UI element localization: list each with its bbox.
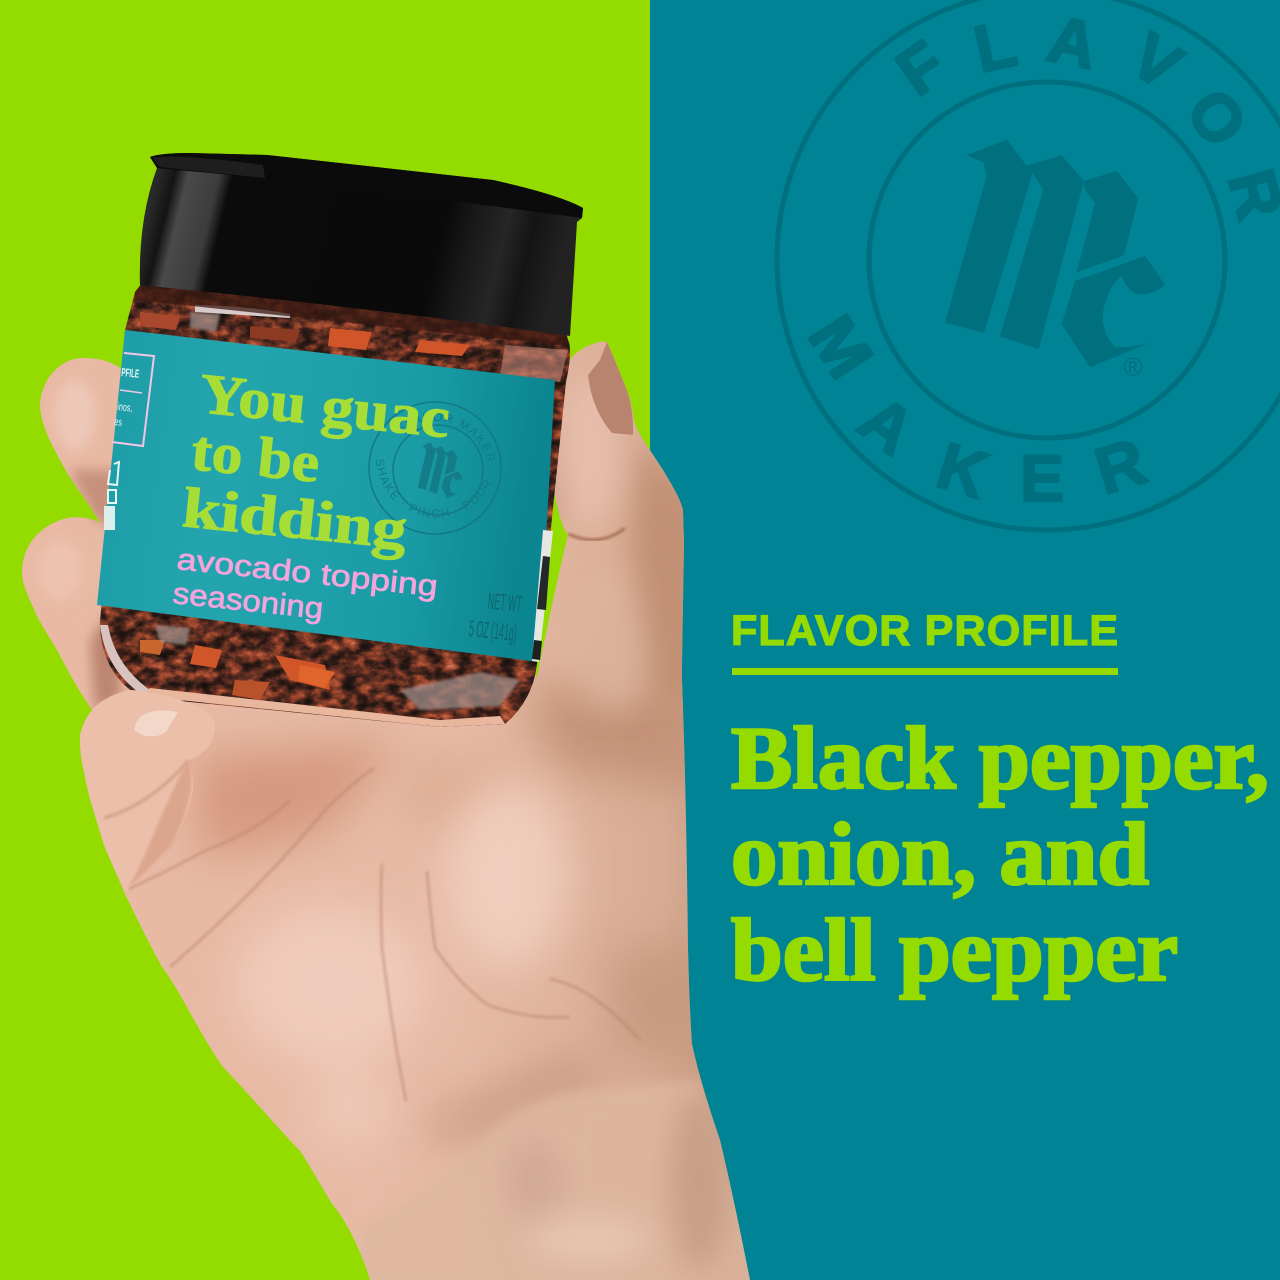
finger crease [104, 761, 188, 818]
cap [140, 153, 583, 336]
seal registered mark: ® [1123, 352, 1143, 382]
jar [97, 153, 583, 727]
label barcode [532, 530, 553, 662]
label side panel text [114, 365, 140, 428]
label title: You guac to be kidding [180, 362, 453, 562]
flavor description: Black pepper, [731, 710, 1269, 808]
wrist skin [360, 1080, 770, 1280]
label title: You guac to be kidding: You guac [197, 362, 453, 450]
label side panel text: PFILE [121, 365, 140, 380]
label [97, 330, 555, 662]
seal lettering: FLAVOR MAKER [794, 1, 1280, 515]
heading underline [732, 668, 1118, 675]
seal lettering: FLAVOR MAKER: L [968, 6, 1023, 86]
label seal text [376, 413, 495, 518]
palm creases [129, 768, 640, 1101]
label subtitle: avocado topping seasoning: seasoning [171, 577, 325, 626]
glass base highlight [100, 625, 150, 697]
flavor description: bell pepper [731, 902, 1178, 1000]
thumb tones [554, 381, 684, 708]
hand: palm and fingers [22, 342, 770, 1280]
lower finger [80, 690, 215, 891]
label subtitle: avocado topping seasoning: avocado topping [175, 543, 439, 603]
seal lettering: FLAVOR MAKER: R [1087, 424, 1154, 508]
seal lettering: FLAVOR MAKER: A [1042, 1, 1104, 83]
seal outer and inner rings [777, 0, 1280, 530]
seal lettering: FLAVOR MAKER: V [1118, 18, 1195, 104]
label seal monogram [418, 442, 463, 499]
label side panel [112, 353, 154, 446]
label side panel text: es [114, 416, 123, 428]
seal lettering: FLAVOR MAKER: O [1172, 75, 1262, 160]
cap rim [150, 153, 583, 218]
fingernail [134, 710, 178, 737]
jar shoulder glass [500, 345, 568, 382]
label icons [108, 462, 119, 503]
highlights on palm [231, 768, 582, 1146]
label watermark seal [369, 402, 501, 534]
teal background panel [650, 0, 1280, 1280]
photo: hand holding jar [22, 153, 750, 1280]
label side panel text: inos, [117, 401, 133, 414]
label: NET WT [487, 588, 523, 617]
finger shading [38, 380, 125, 710]
seasoning flakes [140, 312, 470, 700]
flavor description [731, 710, 1269, 1000]
label net weight [468, 588, 523, 646]
seal monogram [945, 140, 1165, 367]
glass top highlight [195, 305, 290, 318]
watermark: Flavor Maker seal [777, 0, 1280, 530]
label barcode icon [104, 506, 115, 530]
green background panel [0, 0, 650, 1280]
seal lettering: FLAVOR MAKER: K [929, 428, 997, 512]
thumbnail [588, 342, 633, 435]
label subtitle: avocado topping seasoning [171, 543, 439, 626]
seal lettering: FLAVOR MAKER: F [883, 26, 958, 110]
thumb base crease [568, 528, 625, 540]
jar contents: seasoning [100, 285, 570, 727]
warm shadows on palm [195, 680, 700, 1150]
flavor description: onion, and [731, 806, 1149, 904]
seal lettering: FLAVOR MAKER: E [1020, 441, 1064, 515]
pale flakes [155, 312, 520, 710]
label seal text: FLAVOR MAKER [400, 413, 495, 462]
finger shading [128, 761, 191, 888]
label title: You guac to be kidding: to be [189, 419, 322, 495]
label title: You guac to be kidding: kidding [180, 476, 410, 562]
label seal text: SHAKE · PINCH · POUR [376, 459, 492, 518]
label: 5 OZ (141g) [468, 615, 518, 646]
seal lettering: FLAVOR MAKER: M [794, 303, 887, 391]
heading: flavor profile: FLAVOR PROFILE [731, 607, 1118, 655]
seal lettering: FLAVOR MAKER: A [846, 381, 928, 469]
